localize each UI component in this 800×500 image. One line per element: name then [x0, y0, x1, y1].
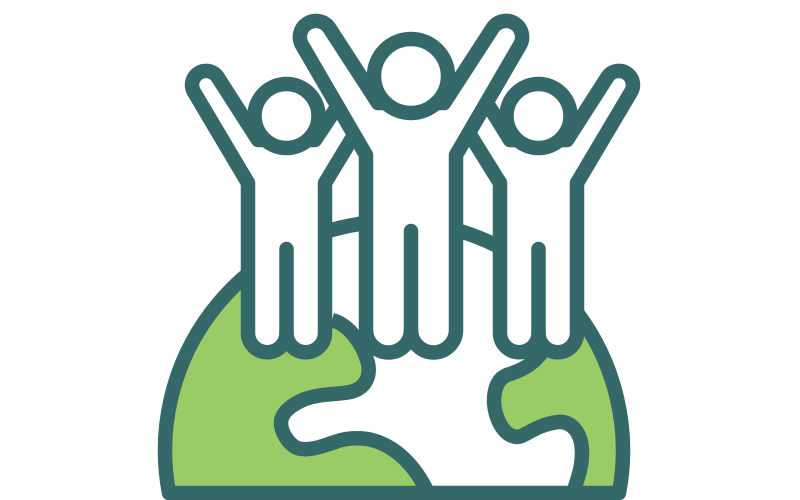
icon: right person — [459, 71, 633, 352]
left continent — [165, 276, 428, 493]
icon: left person — [192, 71, 365, 352]
globe outline and coastlines — [165, 221, 623, 493]
globe disc — [165, 221, 623, 493]
icon: centre person — [300, 21, 522, 352]
icon: globe — [165, 221, 623, 493]
right continent — [494, 314, 623, 493]
